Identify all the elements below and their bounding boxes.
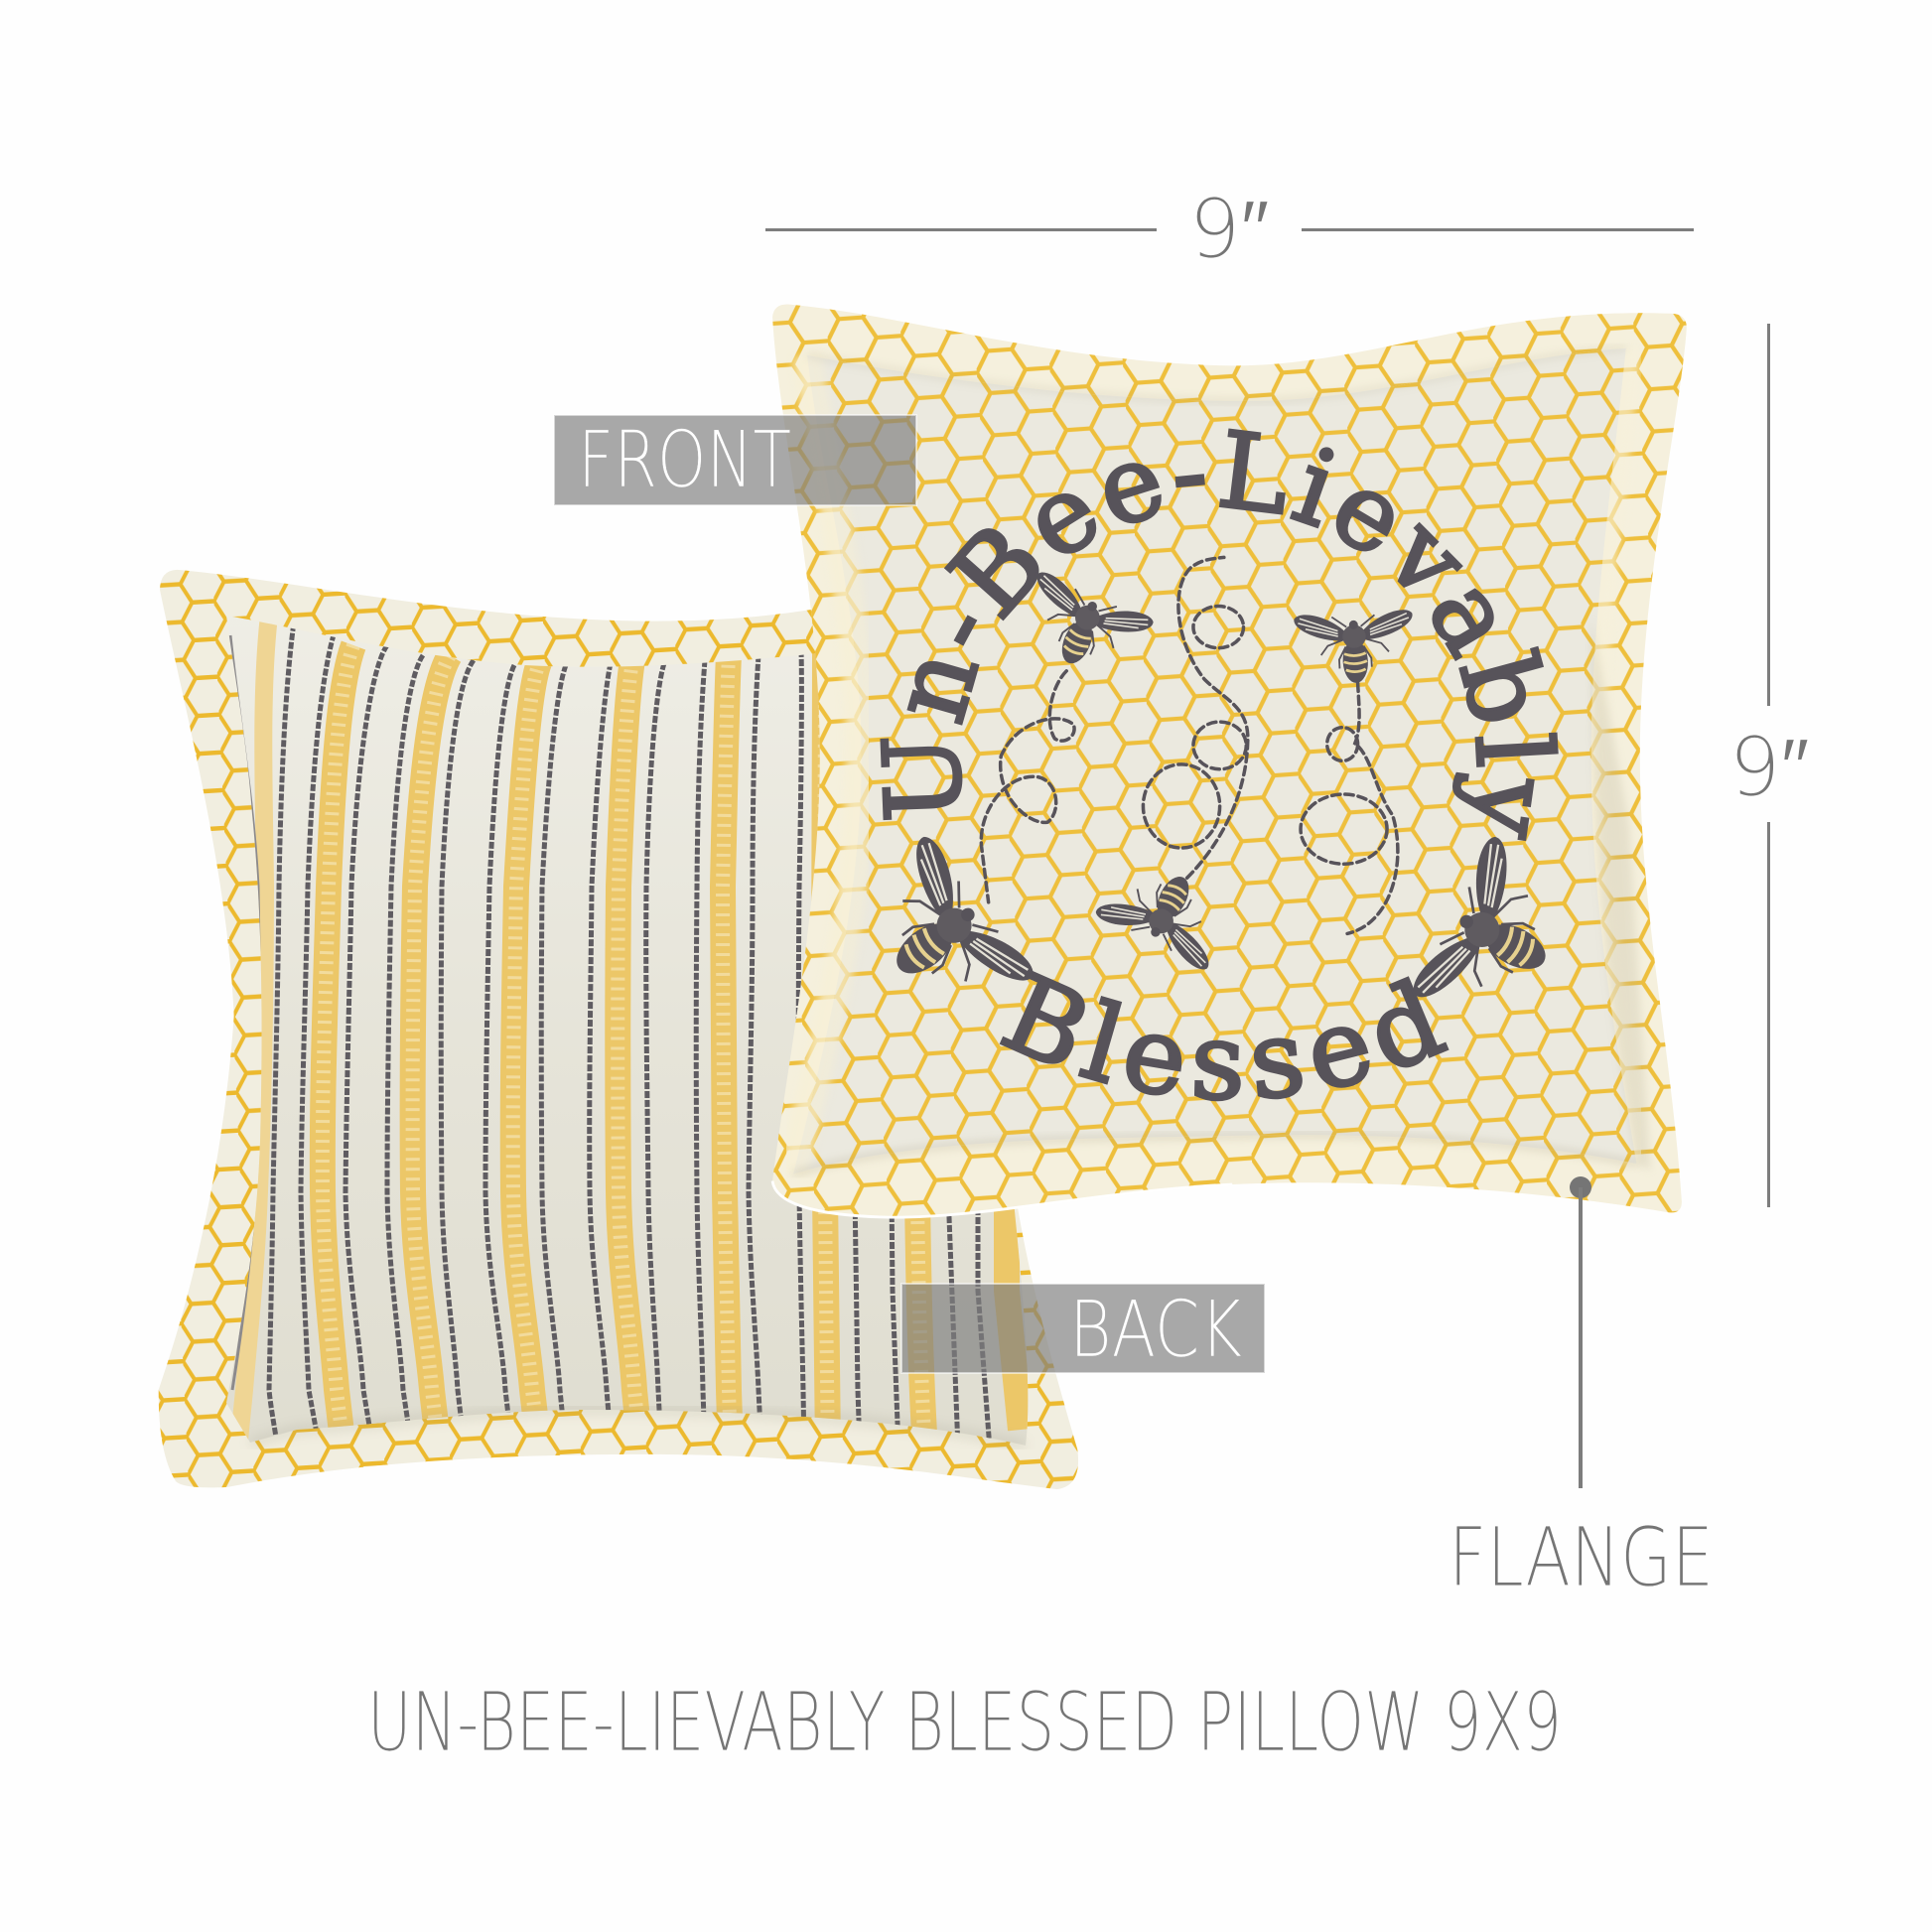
bee centre bottom: [1094, 849, 1239, 972]
height dimension: 9 inches: 9″: [1728, 721, 1810, 815]
width dimension: 9 inches: 9″: [1188, 183, 1270, 277]
front pillow flange with honeycomb: [772, 305, 1687, 1217]
bee top left: [1011, 570, 1155, 687]
back pillow striped body: [226, 616, 1029, 1446]
bee lower right: [1410, 834, 1585, 1040]
back pillow flange with honeycomb: [159, 570, 1078, 1489]
height dimension: 9 inches: [1728, 324, 1810, 1207]
back pillow: [159, 570, 1092, 1489]
title: UN-BEE-LIEVABLY BLESSED PILLOW 9X9: [367, 1676, 1562, 1770]
outer yellow stripes: [238, 616, 1021, 1449]
width dimension: 9 inches: [765, 183, 1694, 277]
flange callout with leader line: [1449, 1176, 1714, 1605]
label: BACK: BACK: [1069, 1286, 1242, 1375]
curved text: Blessed: Blessed: [999, 971, 1449, 1102]
curved text: Un-Bee-Lievably: Un-Bee-Lievably: [880, 429, 1559, 842]
front pillow: [770, 304, 1687, 1219]
back pillow seam shading: [250, 1410, 1026, 1446]
front pillow body with honeycomb: [793, 348, 1650, 1174]
stripe weave dots: [323, 645, 925, 1449]
yellow woven stripes: [323, 645, 925, 1449]
label: BACK: [901, 1284, 1265, 1375]
dashed bee flight trails: [981, 557, 1398, 933]
infographic canvas: [159, 197, 1807, 1751]
gray zigzag stripes: [269, 616, 990, 1449]
bee top right: [1294, 610, 1416, 686]
bee lower left: [845, 833, 1037, 1038]
label: FRONT: FRONT: [578, 416, 791, 505]
flange callout with leader line: FLANGE: [1449, 1511, 1714, 1605]
